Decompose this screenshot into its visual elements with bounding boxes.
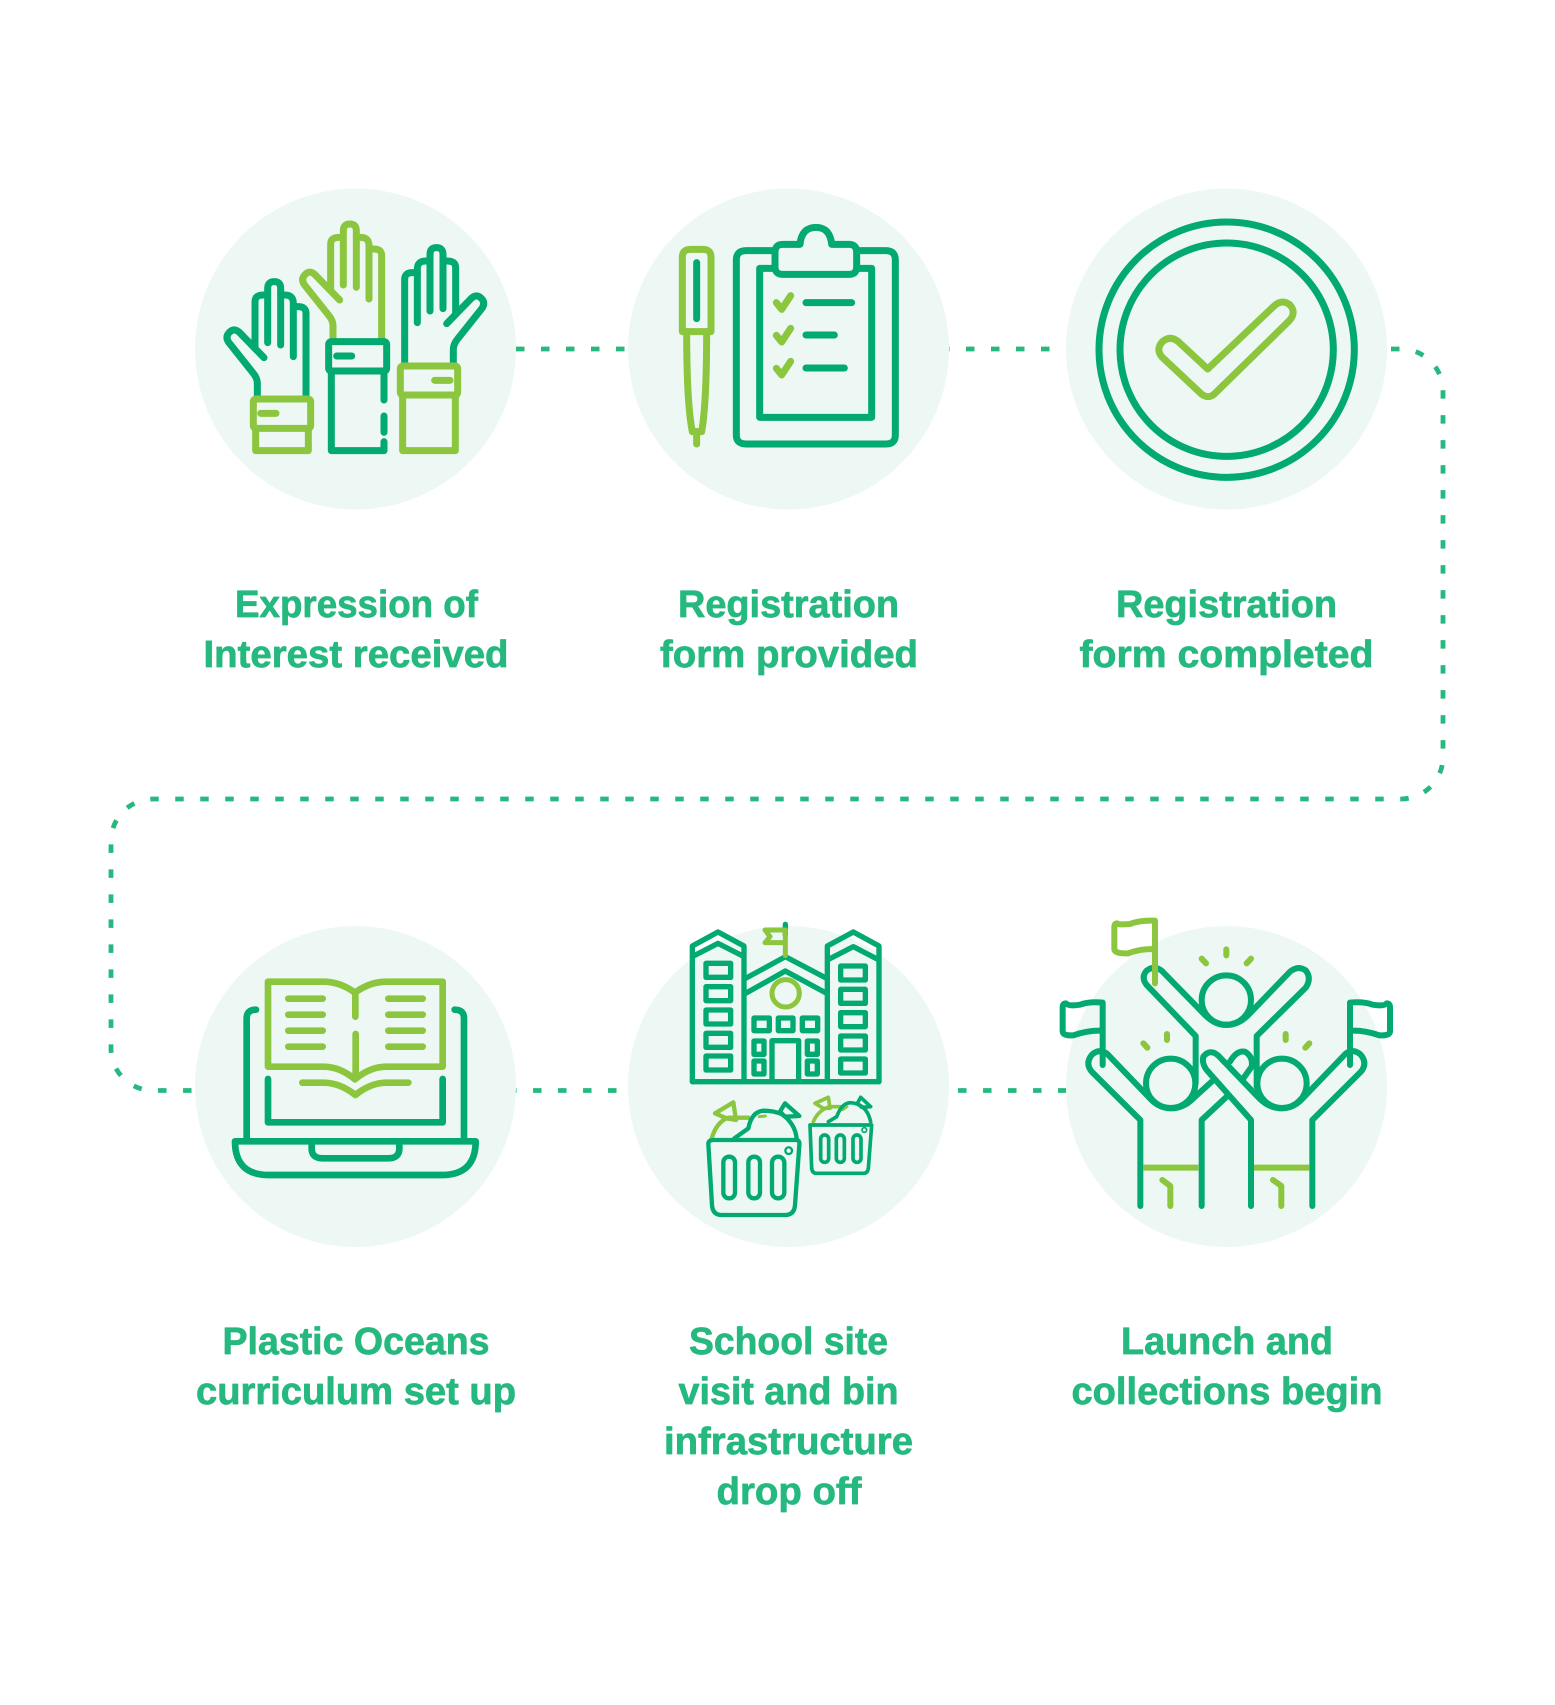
background circle step 3 [1066,188,1387,510]
label step 2 [660,584,918,676]
label step 1: Expression of [235,584,478,626]
label step 4 [196,1321,516,1413]
icon: open book on laptop [235,982,476,1175]
panel: step 4 curriculum set up [195,926,516,1413]
label step 3: form completed [1080,634,1374,676]
icon: three celebrating people with flags [1063,921,1390,1206]
panel: step 3 registration form completed [1066,188,1387,676]
background circle step 6 [1066,926,1387,1247]
label step 4: curriculum set up [196,1371,516,1413]
label step 5: visit and bin [678,1371,898,1413]
background circle step 4 [195,926,516,1247]
label step 5: School site [689,1321,888,1363]
background circle step 5 [628,926,949,1247]
background circle step 2 [628,188,949,510]
label step 3: Registration [1116,584,1337,626]
dotted connector path linking all steps [111,349,1443,1090]
label step 6: Launch and [1121,1321,1333,1363]
panel: step 6 launch and collections begin [1063,921,1390,1413]
icon: raised hands [227,224,484,451]
background circle step 1 [195,188,516,510]
label step 5: infrastructure [664,1421,913,1463]
panel: step 1 expression of interest [195,188,516,676]
panel: step 5 school site visit [628,924,949,1513]
icon: pen and clipboard [682,227,895,444]
label step 1: Interest received [204,634,508,676]
label step 6: collections begin [1072,1371,1382,1413]
label step 6 [1072,1321,1382,1413]
label step 5: drop off [716,1471,862,1513]
label step 4: Plastic Oceans [222,1321,490,1363]
icon: check mark in double ring [1099,222,1354,477]
label step 2: Registration [678,584,899,626]
icon: school building with flag and bins [692,924,879,1215]
label step 1 [204,584,508,676]
label step 2: form provided [660,634,918,676]
label step 5 [664,1321,913,1513]
label step 3 [1080,584,1374,676]
panel: step 2 registration form provided [628,188,949,676]
